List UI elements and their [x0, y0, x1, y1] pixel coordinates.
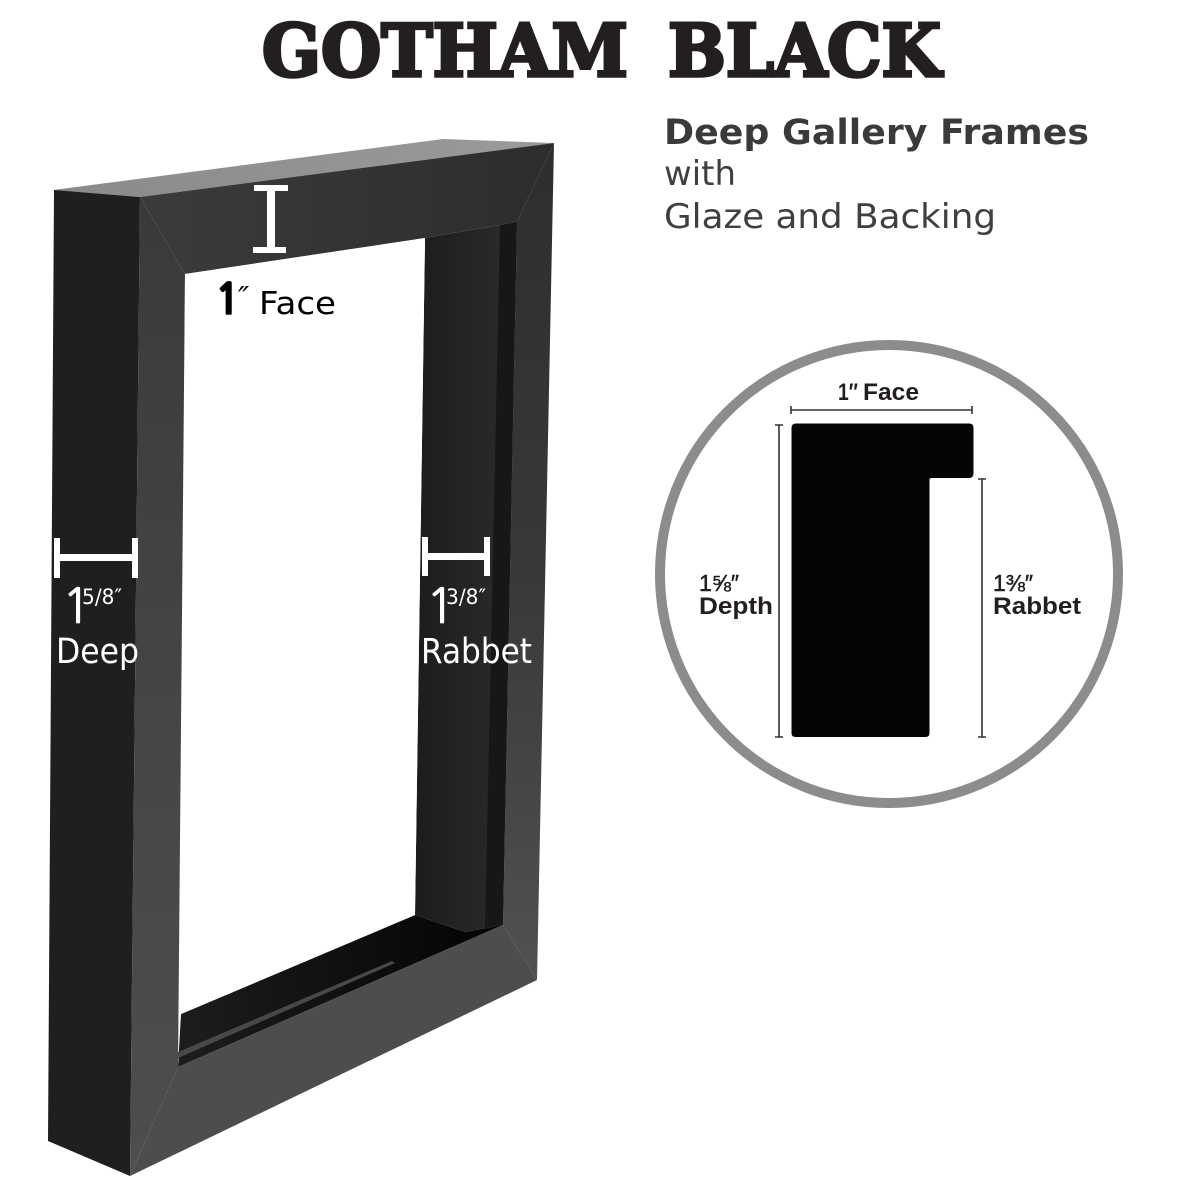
face measure line — [791, 406, 972, 414]
opening — [181, 238, 425, 1014]
frame photo — [48, 139, 554, 1176]
deep label — [56, 582, 139, 672]
face label: ″ — [238, 281, 250, 316]
bottom face strip — [130, 925, 537, 1176]
rabbet text — [993, 570, 1081, 620]
rabbet dimension marker — [422, 537, 490, 576]
left face strip — [130, 197, 185, 1176]
panel: profile diagram — [660, 345, 1118, 803]
heading: Deep Gallery Frames — [664, 113, 1089, 153]
deep label: 1 — [62, 582, 91, 630]
rabbet label — [421, 582, 532, 672]
frame profile cross-section — [792, 424, 974, 737]
top face strip — [140, 143, 554, 274]
left outer side of frame — [48, 190, 140, 1176]
inner bottom sill — [178, 915, 503, 1067]
title — [262, 8, 943, 93]
depth text: Depth — [699, 593, 773, 620]
subheading — [664, 154, 996, 237]
depth text: 1⅝″ — [699, 570, 739, 596]
face text: Face — [863, 379, 919, 406]
inner right wall — [415, 222, 517, 932]
title: GOTHAM — [262, 8, 628, 93]
circle outline — [660, 345, 1118, 803]
right face strip — [503, 143, 554, 980]
deep label: Deep — [56, 632, 139, 672]
depth text — [699, 570, 773, 620]
face text: 1″ — [838, 379, 858, 406]
title: BLACK — [668, 8, 943, 93]
rabbet measure line — [978, 479, 986, 737]
rabbet text: 1⅜″ — [993, 570, 1033, 596]
face label — [215, 280, 336, 322]
top edge of frame — [53, 139, 554, 197]
rabbet label: Rabbet — [421, 632, 532, 672]
face label: Face — [259, 286, 336, 322]
face text — [838, 379, 919, 406]
rabbet text: Rabbet — [993, 593, 1081, 620]
subheading: with — [664, 154, 736, 194]
face label: 1 — [215, 280, 240, 321]
deep label: 5/8″ — [82, 585, 122, 609]
face dimension marker — [253, 185, 288, 253]
rabbet label: 3/8″ — [446, 585, 486, 609]
rabbet label: 1 — [426, 582, 455, 630]
depth measure line — [775, 425, 783, 737]
subheading: Glaze and Backing — [664, 197, 996, 237]
depth dimension marker — [54, 538, 138, 578]
